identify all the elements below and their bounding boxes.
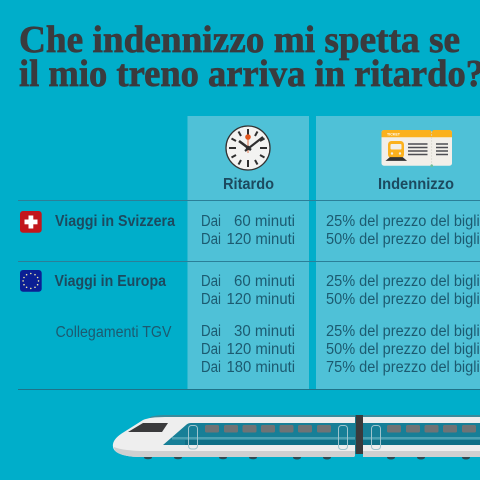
- row: TGV delays: Dai: [201, 341, 221, 358]
- row: Europa delays: 60 minuti: [234, 273, 295, 290]
- row: TGV delays: Dai: [201, 359, 221, 376]
- row: TGV delays: [201, 323, 295, 376]
- row: TGV delays: 30 minuti: [234, 323, 295, 340]
- row: Europa compensation: [326, 273, 480, 308]
- panel: ritardo column: [188, 116, 309, 389]
- row label: Collegamenti TGV: Collegamenti TGV: [56, 324, 172, 341]
- row: Svizzera delays: [201, 213, 295, 248]
- row: Svizzera delays: Dai: [201, 231, 221, 248]
- row: Europa delays: Dai: [201, 291, 221, 308]
- row: Europa delays: 120 minuti: [226, 291, 295, 308]
- row: Svizzera delays: 120 minuti: [226, 231, 295, 248]
- row: TGV delays: 120 minuti: [226, 341, 295, 358]
- row: Svizzera compensation: [326, 213, 480, 248]
- row: Svizzera delays: 60 minuti: [234, 213, 295, 230]
- illustration: high-speed train: [113, 415, 480, 460]
- icon: station clock: [226, 126, 270, 170]
- row: TGV compensation: [326, 323, 480, 376]
- title: [19, 19, 480, 95]
- icon: EU flag: [20, 270, 42, 292]
- row: Europa delays: [201, 273, 295, 308]
- row: TGV delays: 180 minuti: [226, 359, 295, 376]
- row label: Viaggi in Svizzera: Viaggi in Svizzera: [55, 213, 175, 230]
- icon: Swiss flag: [20, 211, 42, 233]
- row: Europa delays: Dai: [201, 273, 221, 290]
- heading: Indennizzo: Indennizzo: [378, 176, 454, 193]
- icon: train ticket: TICKET: [387, 132, 401, 136]
- panel: indennizzo column: [316, 116, 480, 389]
- row: Svizzera delays: Dai: [201, 213, 221, 230]
- title: Che indennizzo mi spetta se: [19, 19, 460, 61]
- icon: train ticket: [382, 129, 452, 167]
- row: TGV delays: Dai: [201, 323, 221, 340]
- heading: Ritardo: Ritardo: [223, 176, 274, 193]
- row label: Viaggi in Europa: Viaggi in Europa: [54, 273, 166, 290]
